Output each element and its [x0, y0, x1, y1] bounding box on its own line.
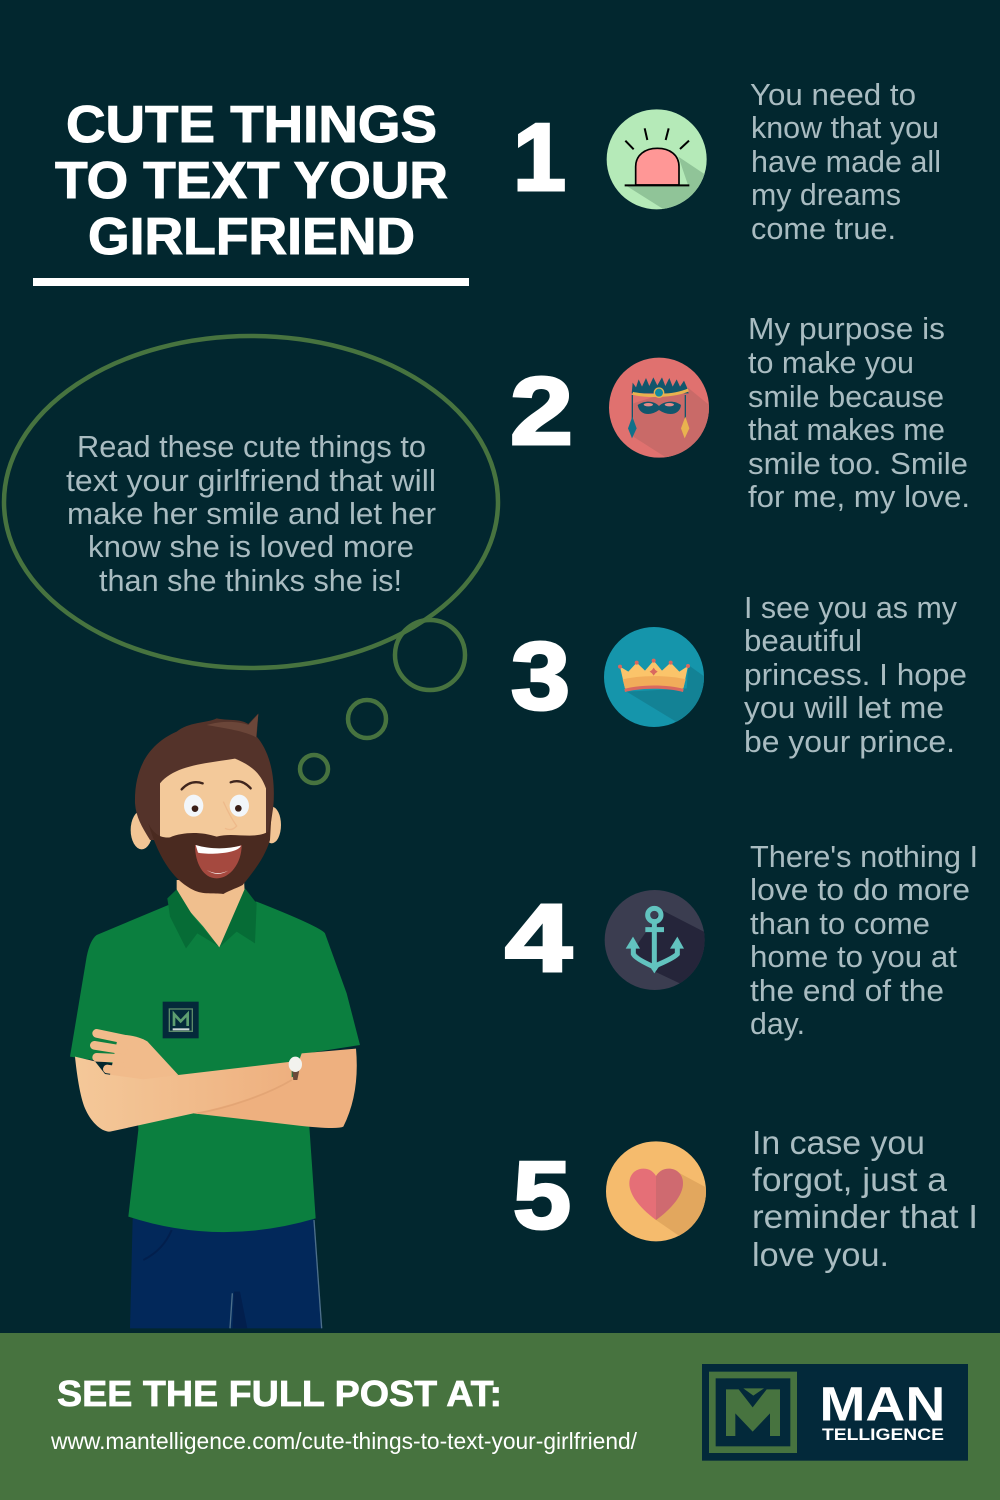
nose: [223, 802, 237, 830]
eyebrows: [182, 781, 251, 789]
icon: anchor: [604, 890, 705, 990]
wristwatch: [289, 1057, 302, 1080]
item 2 text: for me, my love.: [748, 479, 970, 514]
title: TO TEXT YOUR: [55, 152, 448, 210]
collar: [167, 888, 257, 948]
item 3 number: 3: [511, 623, 570, 730]
footer band: [0, 1333, 1000, 1500]
icon: carnival mask: [609, 358, 709, 458]
item 2 number: 2: [510, 358, 573, 465]
item 2 text: My purpose is: [748, 311, 945, 346]
forearm shadow: [197, 1080, 292, 1113]
logo: [702, 1364, 968, 1461]
item 5 text: [752, 1124, 978, 1273]
item 5 text: In case you: [752, 1124, 925, 1161]
item 3 text: be your prince.: [744, 724, 955, 759]
item 1 text: come true.: [751, 211, 896, 246]
item 5 text: forgot, just a: [752, 1161, 948, 1198]
item 1 text: [750, 77, 941, 246]
item 4 text: home to you at: [750, 939, 957, 974]
item 3 text: I see you as my: [744, 590, 957, 625]
neck: [177, 880, 245, 947]
intro text: Read these cute things to: [77, 429, 426, 464]
item 4 text: than to come: [750, 906, 930, 941]
item 3 text: you will let me: [744, 690, 944, 725]
item 5 text: love you.: [752, 1236, 889, 1273]
footer call to action: SEE THE FULL POST AT:: [57, 1373, 502, 1414]
item 1 text: have made all: [751, 144, 941, 179]
item 2 text: that makes me: [748, 412, 945, 447]
item 4 text: [750, 839, 978, 1041]
intro text: know she is loved more: [88, 529, 414, 564]
item 4 text: the end of the: [750, 973, 944, 1008]
item 4 number: 4: [505, 885, 572, 992]
intro text: text your girlfriend that will: [66, 463, 436, 498]
back arm: [193, 1049, 357, 1128]
item 1 text: my dreams: [751, 177, 901, 212]
hand: [94, 1033, 178, 1083]
shirt badge: [163, 1002, 199, 1038]
item 4 text: love to do more: [750, 872, 970, 907]
icon: crown: [604, 627, 704, 727]
item 5 number: 5: [513, 1142, 571, 1249]
front arm: [75, 1057, 292, 1132]
item 2 text: to make you: [748, 345, 914, 380]
item 1 text: You need to: [750, 77, 916, 112]
item 4 text: day.: [750, 1006, 805, 1041]
item 3 text: beautiful: [744, 623, 862, 658]
item 2 text: smile because: [748, 379, 944, 414]
title: GIRLFRIEND: [88, 208, 415, 266]
shirt: [70, 902, 360, 1232]
thought bubble: [4, 336, 498, 783]
ears: [131, 807, 281, 849]
item 5 text: reminder that I: [752, 1198, 978, 1235]
title: CUTE THINGS: [66, 96, 437, 154]
logo: MAN: [819, 1378, 945, 1432]
beard: [148, 810, 272, 894]
intro text: [66, 429, 436, 598]
intro text: than she thinks she is!: [99, 563, 402, 598]
icon: heart: [606, 1141, 706, 1242]
hair: [135, 713, 274, 840]
item 2 text: [748, 311, 970, 514]
character illustration: [70, 713, 360, 1328]
item 4 text: There's nothing I: [750, 839, 978, 874]
item 3 text: princess. I hope: [744, 657, 967, 692]
intro text: make her smile and let her: [67, 496, 436, 531]
item 2 text: smile too. Smile: [748, 446, 968, 481]
eyes: [184, 795, 203, 817]
trousers: [130, 1218, 322, 1328]
title: [33, 96, 469, 286]
footer url: www.mantelligence.com/cute-things-to-text-your-girlfriend/: [50, 1428, 638, 1454]
icon: siren: [606, 109, 707, 210]
logo: TELLIGENCE: [822, 1425, 944, 1444]
face: [160, 759, 266, 840]
item 1 number: 1: [513, 104, 566, 211]
item 1 text: know that you: [751, 110, 939, 145]
mouth: [195, 845, 242, 878]
item 3 text: [744, 590, 967, 759]
